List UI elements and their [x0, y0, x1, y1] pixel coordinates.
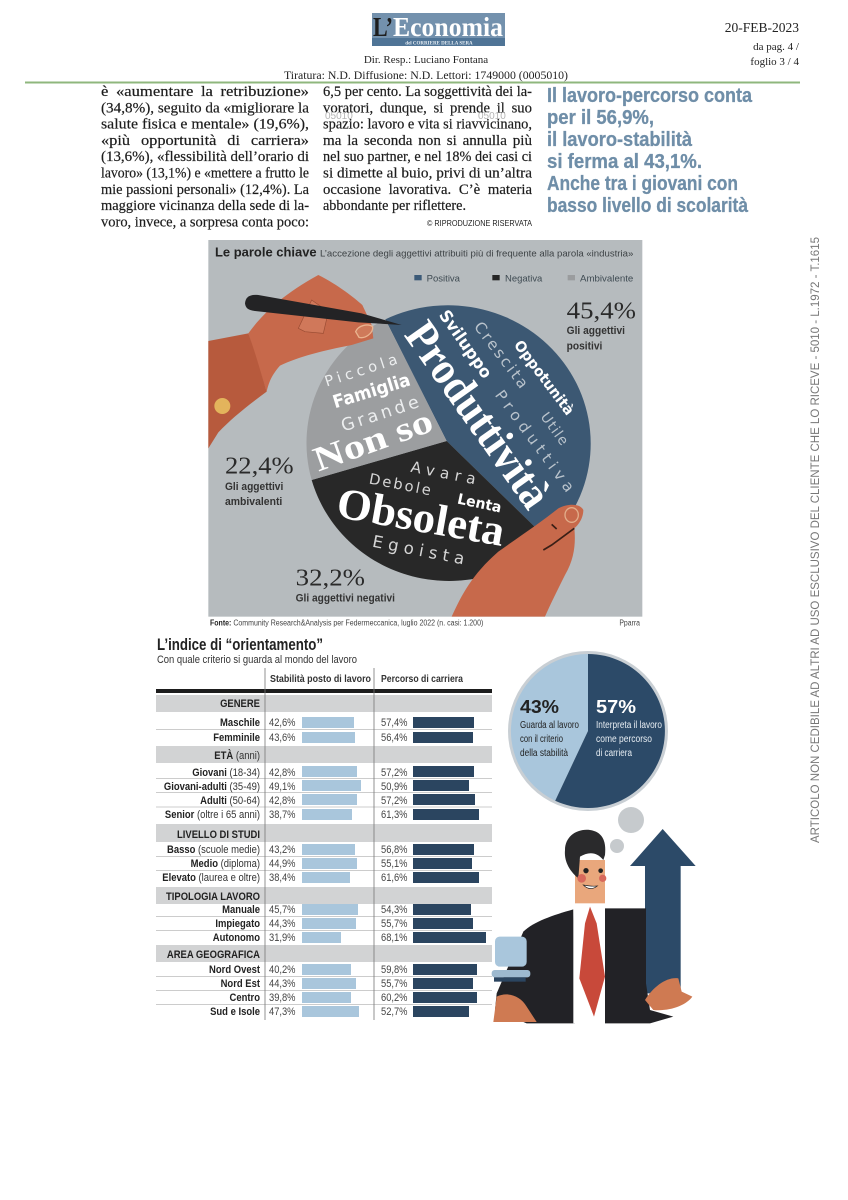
source line: Pparra [619, 619, 640, 628]
article text: right column [323, 84, 533, 214]
watermark codes [325, 111, 506, 122]
callout: 32,2% negative: 32,2% [296, 566, 365, 592]
row labels: Elevato (laurea e oltre) [162, 872, 260, 884]
row labels: Nord Est [221, 978, 261, 990]
article text: left column: lavoro» (13,1%) e «mettere a frutto le [101, 166, 309, 182]
positive words: Produttività [395, 311, 562, 518]
panel title: L’accezione degli aggettivi attribuiti più di frequente alla parola «industria» [320, 248, 633, 258]
label: 43%: con il criterio [520, 734, 563, 745]
percorso values: 55,7% [381, 978, 407, 990]
table title: L’indice di “orientamento” [157, 635, 323, 654]
percorso values: 56,8% [381, 844, 407, 856]
article text: left column: (13,6%), «flessibilità dell’orario di [101, 149, 309, 165]
article text: right column: occasione lavorativa. C’è materia [323, 182, 533, 198]
article text: right column: voratori, dunque, si prende il suo [323, 100, 532, 116]
row labels: LIVELLO DI STUDI [177, 829, 260, 841]
column headers: Percorso di carriera [381, 673, 463, 685]
legend [414, 273, 633, 283]
ambivalent words: Famiglia [330, 370, 413, 413]
panel title [215, 245, 633, 259]
label: 57%: 57% [596, 697, 636, 717]
legend: Ambivalente [580, 273, 633, 283]
callout: 45,4% positive: Gli aggettivi [567, 325, 625, 337]
ambivalent words [308, 351, 438, 479]
row labels [162, 698, 261, 1018]
negative words: Obsoleta [333, 478, 509, 556]
row labels: Senior (oltre i 65 anni) [165, 809, 260, 821]
positive words: Produttiva [491, 387, 578, 496]
row labels: Sud e Isole [210, 1006, 260, 1018]
article text: right column: nel suo partner, e nel 18% dei casi ci [323, 149, 532, 165]
percorso values: 61,3% [381, 809, 407, 821]
negative words: Egoista [371, 532, 466, 568]
column headers [270, 673, 463, 685]
positive words: Sviluppo [435, 306, 496, 382]
callout: 45,4% positive [567, 298, 636, 353]
logo: L'Economia: L’ [373, 12, 393, 42]
negative words: Lenta [456, 491, 503, 517]
table: indice di orientamento [156, 668, 492, 1020]
row labels: Adulti (50-64) [200, 795, 260, 807]
stabilità values: 43,6% [269, 732, 295, 744]
percorso values: 54,3% [381, 904, 407, 916]
callout: 32,2% negative: Gli aggettivi negativi [296, 593, 395, 605]
row labels: Manuale [222, 904, 260, 916]
negative words: Avara [409, 458, 477, 488]
callout: 22,4% ambivalent [225, 454, 294, 508]
source line: Fonte: Community Research&Analysis per Federmeccanica, luglio 2022 (n. casi: 1.200) [210, 619, 484, 628]
watermark codes: 05010 [325, 111, 353, 122]
callout: 22,4% ambivalent: 22,4% [225, 454, 294, 480]
dark bars: percorso [413, 717, 486, 1017]
vertical notice: ARTICOLO NON CEDIBILE AD ALTRI AD USO ESCLUSIVO DEL CLIENTE CHE LO RICEVE - 5010 - L.1972 - T.1615 [810, 237, 822, 843]
row labels: Maschile [220, 717, 260, 729]
row labels: TIPOLOGIA LAVORO [166, 891, 260, 903]
stabilità values: 42,8% [269, 767, 295, 779]
callout: 22,4% ambivalent: Gli aggettivi [225, 481, 283, 493]
article text: left column: mie passioni personali» (12,4%). La [101, 182, 310, 198]
percorso values: 56,4% [381, 732, 407, 744]
percorso values: 55,1% [381, 858, 407, 870]
watermark codes: 05010 [478, 111, 506, 122]
shirt [573, 903, 605, 1023]
side heading: lavoro-percorso [547, 85, 753, 217]
callout: 32,2% negative [296, 566, 395, 605]
stabilità values: 31,9% [269, 932, 295, 944]
article text: left column: è «aumentare la retribuzione» [101, 84, 309, 100]
logo: L'Economia: del CORRIERE DELLA SERA [405, 42, 473, 46]
positive words: Crescita [470, 318, 532, 392]
side heading: lavoro-percorso: basso livello di scolarità [547, 195, 749, 217]
article text: left column [101, 84, 310, 230]
label: 57%: Interpreta il lavoro [596, 720, 662, 731]
icon: chair or device on hand [492, 937, 530, 982]
callout: 22,4% ambivalent: ambivalenti [225, 496, 282, 508]
article text: left column: voro, invece, a sorpresa conta poco: [101, 214, 309, 230]
illustration: thought bubbles [610, 807, 644, 853]
article text: left column: (34,8%), seguito da «migliorare la [101, 100, 310, 116]
section bands [156, 695, 492, 962]
panel title: Le parole chiave [215, 245, 317, 259]
positive words: Oppotunità [510, 337, 577, 419]
stabilità values: 44,9% [269, 858, 295, 870]
label: 43%: 43% [520, 697, 559, 717]
percorso values [381, 717, 407, 1018]
percorso values: 52,7% [381, 1006, 407, 1018]
percorso values: 57,2% [381, 767, 407, 779]
percorso values: 57,2% [381, 795, 407, 807]
header: date and page [725, 20, 800, 68]
side heading: lavoro-percorso: Il lavoro-percorso conta [547, 85, 753, 107]
article text: right column: abbondante per riflettere. [323, 198, 466, 214]
stabilità values: 47,3% [269, 1006, 295, 1018]
negative words [333, 458, 509, 568]
illustration: right hand [452, 505, 583, 617]
percorso values: 59,8% [381, 964, 407, 976]
hands [493, 978, 692, 1022]
stabilità values: 43,2% [269, 844, 295, 856]
header: circulation line: Tiratura: N.D. Diffusione: N.D. Lettori: 1749000 (0005010) [284, 70, 568, 82]
header: date and page: 20-FEB-2023 [725, 20, 799, 35]
stabilità values: 44,3% [269, 918, 295, 930]
tie [579, 907, 605, 1017]
column headers: Stabilità posto di lavoro [270, 673, 371, 685]
stabilità values: 49,1% [269, 781, 295, 793]
ambivalent words: Non so [308, 402, 438, 479]
head [565, 830, 606, 903]
label: 57%: di carriera [596, 748, 632, 759]
percorso values: 60,2% [381, 992, 407, 1004]
stabilità values: 40,2% [269, 964, 295, 976]
stabilità values: 45,7% [269, 904, 295, 916]
label: 43%: della stabilità [520, 748, 568, 759]
article text: left column: maggiore vicinanza della sede di la- [101, 198, 309, 214]
row labels: Medio (diploma) [191, 858, 260, 870]
illustration: businessman with arrow [492, 829, 696, 1023]
ambivalent words: Piccola [323, 351, 400, 390]
negative words: Debole [368, 471, 432, 499]
article text: right column: 6,5 per cento. La soggettività dei la- [323, 84, 532, 100]
jacket [495, 908, 673, 1023]
label: 43%: Guarda al lavoro [520, 720, 579, 731]
row labels: Impiegato [215, 918, 260, 930]
icon: rising arrow [630, 829, 696, 993]
logo: L'Economia: Economia [393, 12, 503, 42]
callout: 45,4% positive: 45,4% [567, 298, 636, 324]
label: 43% [520, 697, 579, 759]
word pie chart [306, 305, 591, 581]
row labels: Giovani (18-34) [192, 767, 260, 779]
copyright note: © RIPRODUZIONE RISERVATA [427, 218, 532, 228]
illustration: left hand with pen [208, 275, 402, 448]
row labels: Autonomo [213, 932, 260, 944]
stabilità values [269, 717, 295, 1018]
header: director line: Dir. Resp.: Luciano Fontana [364, 54, 488, 66]
percorso values: 55,7% [381, 918, 407, 930]
side heading: lavoro-percorso: il lavoro-stabilità [547, 129, 693, 151]
percorso values: 57,4% [381, 717, 407, 729]
row labels: Giovani-adulti (35-49) [164, 781, 260, 793]
light bars: stabilità [302, 717, 361, 1017]
side heading: lavoro-percorso: per il 56,9%, [547, 107, 654, 129]
percorso values: 50,9% [381, 781, 407, 793]
row labels: Centro [230, 992, 260, 1004]
stabilità values: 38,4% [269, 872, 295, 884]
side heading: lavoro-percorso: si ferma al 43,1%. [547, 151, 702, 173]
pie chart: 43% / 57% [508, 651, 668, 811]
label: 57%: come percorso [596, 734, 652, 745]
article text: right column: si dimette al buio, privi di un’altra [323, 166, 533, 182]
side heading: lavoro-percorso: Anche tra i giovani con [547, 173, 738, 195]
header: date and page: da pag. 4 / [753, 41, 800, 53]
stabilità values: 44,3% [269, 978, 295, 990]
table title: Con quale criterio si guarda al mondo del lavoro [157, 654, 357, 666]
row labels: ETÀ (anni) [214, 748, 260, 762]
panel: le parole chiave [208, 240, 642, 628]
positive words: Utile [537, 410, 571, 449]
row labels: Femminile [213, 732, 260, 744]
stabilità values: 38,7% [269, 809, 295, 821]
callout: 45,4% positive: positivi [567, 341, 602, 353]
row labels: Nord Ovest [209, 964, 261, 976]
stabilità values: 42,6% [269, 717, 295, 729]
legend: Negativa [505, 273, 542, 283]
table title [157, 635, 357, 666]
article text: right column: spazio: lavoro e vita si riavvicinano, [323, 117, 532, 133]
stabilità values: 39,8% [269, 992, 295, 1004]
stabilità values: 42,8% [269, 795, 295, 807]
percorso values: 68,1% [381, 932, 407, 944]
row labels: AREA GEOGRAFICA [167, 949, 261, 961]
article text: left column: «più opportunità di carriera» [101, 133, 309, 149]
legend: Positiva [427, 273, 460, 283]
ambivalent words: Grande [339, 392, 422, 436]
article text: right column: ma la seconda non si annulla più [323, 133, 532, 149]
label: 57% [596, 697, 662, 759]
percorso values: 61,6% [381, 872, 407, 884]
row labels: Basso (scuole medie) [167, 844, 260, 856]
row labels: GENERE [220, 698, 260, 710]
header: date and page: foglio 3 / 4 [750, 56, 799, 68]
article text: left column: salute fisica e mentale» (19,6%), [101, 117, 309, 133]
